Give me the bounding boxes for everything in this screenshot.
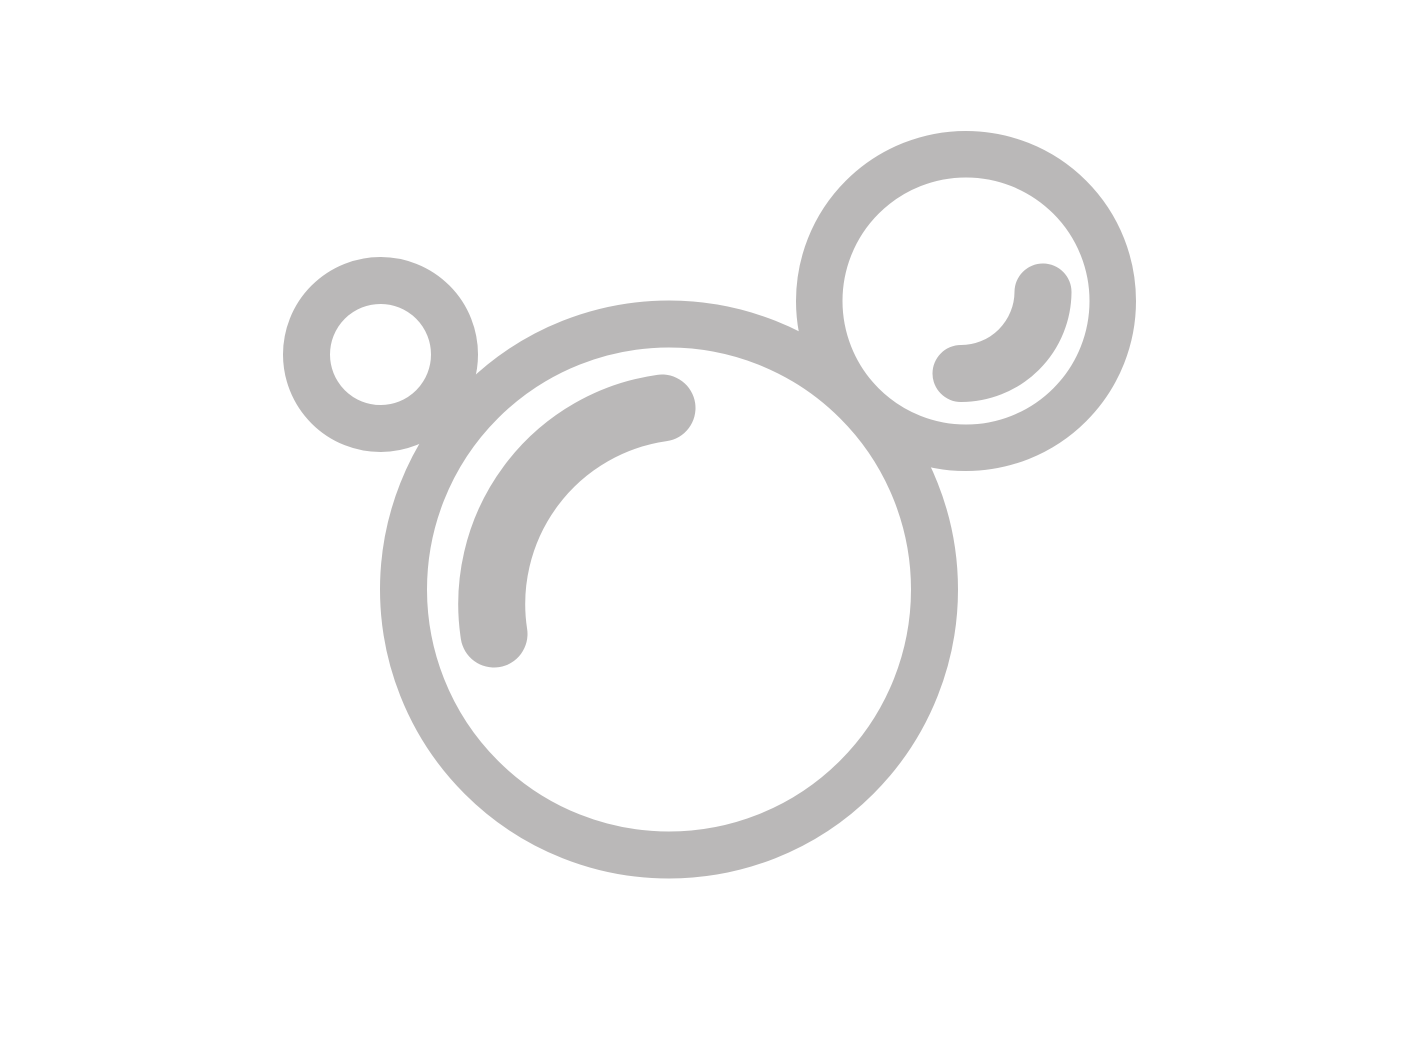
upper right bubble highlight — [961, 292, 1043, 374]
icon: small left bubble — [306, 280, 454, 428]
icon: upper right bubble — [819, 154, 1113, 448]
icon: large bubble — [404, 324, 934, 855]
upper right bubble ring — [819, 154, 1113, 448]
large bubble ring — [404, 324, 934, 855]
large bubble highlight — [492, 408, 662, 634]
